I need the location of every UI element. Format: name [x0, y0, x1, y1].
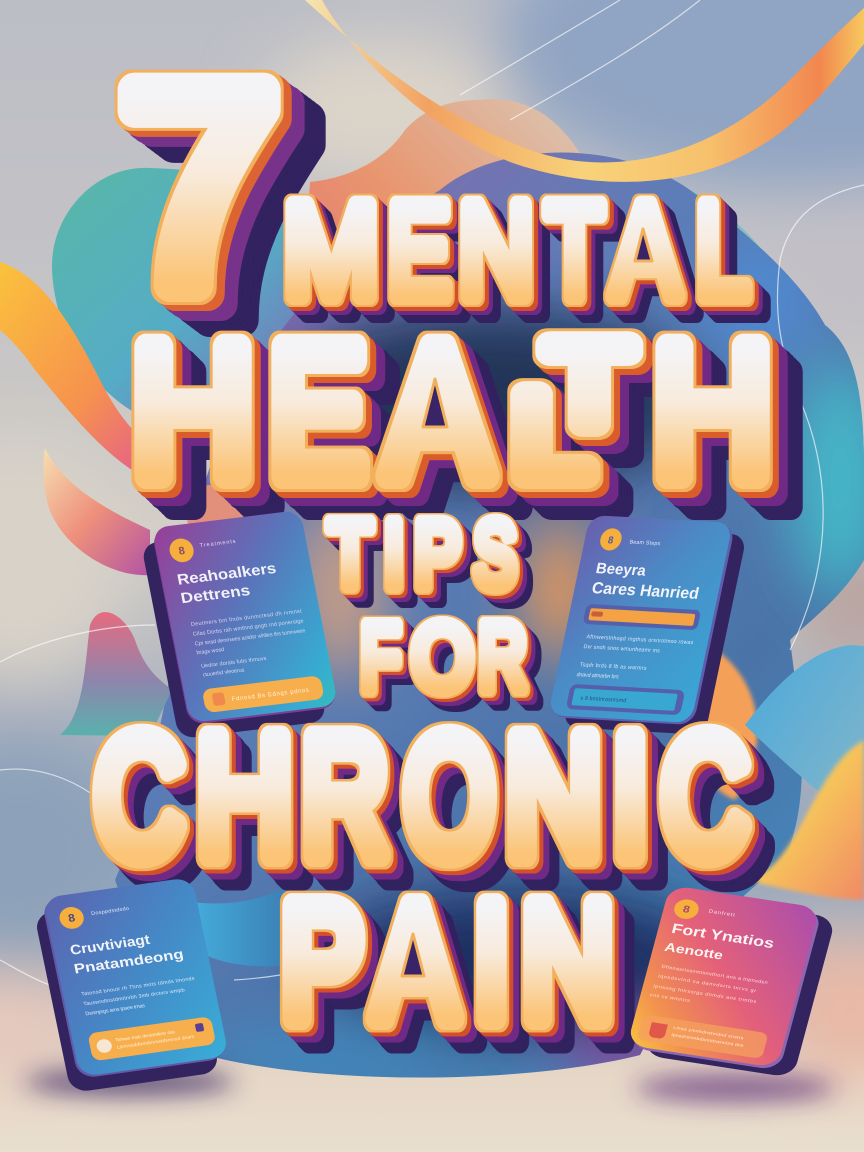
title: HEALTH: H — [653, 306, 772, 516]
title: CHRONIC: C — [661, 701, 749, 892]
card: top right: Cares Hanried — [590, 580, 700, 603]
card: bottom right: 8 — [682, 904, 691, 915]
title: HEALTH: H — [132, 306, 254, 516]
blob: lower blue swoosh — [180, 885, 290, 966]
title: PAIN: A — [374, 870, 456, 1053]
card: top right: Dxr snoh snos wmurtheamr ms — [583, 644, 661, 654]
title: 7: 7 — [120, 29, 278, 346]
title: FOR: R — [478, 604, 527, 709]
card: top left: Cilas Dorbs rah wmthnd gngtt rnd ponerstge — [192, 618, 304, 638]
blob: peach centre — [300, 99, 620, 420]
card: bottom left: Pnatamdeong — [73, 947, 185, 977]
title: CHRONIC: R — [302, 701, 388, 892]
blob: teal left — [52, 168, 340, 436]
card: top left: Deutmers bnt finds dunmctesd dh rvmnst — [191, 609, 303, 628]
title: MENTAL: E — [388, 177, 450, 325]
title: HEALTH: L — [514, 369, 590, 502]
card: top left: Treatments — [199, 539, 236, 549]
card: bottom left: Tsmwn mstr dvrsmtdnsr ssa — [115, 1029, 176, 1043]
card 1 depth — [141, 526, 327, 739]
title: PAIN: N — [522, 870, 613, 1053]
card: bottom left: Tatonsd bnoutr rh Thns mots tdmds tmonds — [81, 976, 196, 998]
card: bottom right: Danfrett — [708, 909, 736, 918]
card: bottom right: Ipnsdrsmnbdsmtdnsrmtns dns — [671, 1032, 745, 1048]
title: MENTAL: M — [284, 177, 378, 325]
card: top left: Fdnosd Bs Edngs pdnos — [231, 688, 310, 703]
title: TIPS: I — [384, 502, 404, 606]
title: TIPS: T — [328, 502, 372, 606]
card: top left: brags wosd — [196, 647, 225, 656]
card: top right — [548, 515, 747, 735]
card: top right: s 8 bnstnrosnrsmd — [580, 696, 627, 704]
blob: dark and colour glows inside main shape — [180, 240, 864, 1085]
card: bottom right — [626, 885, 836, 1078]
card: bottom right: Ipnsnsg fnlrssrgs dnmds ans trmtbs — [652, 984, 757, 1005]
card: top right: 8 — [607, 535, 615, 547]
title: MENTAL: T — [546, 177, 604, 325]
blob: left hook — [43, 448, 150, 575]
title: MENTAL — [284, 177, 749, 325]
card 3 depth — [34, 893, 220, 1093]
ribbon: left orange wave — [0, 262, 180, 480]
card: bottom right: Fort Ynatios — [670, 921, 776, 952]
title: CHRONIC: H — [197, 701, 292, 892]
blob: right blue — [745, 645, 864, 830]
card: top left: ctuuerhd vleoerus — [202, 667, 245, 678]
blob: right yellow orange — [745, 740, 864, 900]
title: FOR: O — [412, 604, 473, 709]
title: PAIN: P — [281, 870, 363, 1053]
title: HEALTH: A — [386, 306, 490, 516]
card: top left: 8 — [178, 545, 186, 558]
card: bottom left: Dsnmprgs ams tpsee tmas — [85, 1003, 146, 1017]
title: HEALTH: T — [548, 319, 631, 449]
blob: teal edge right — [690, 190, 800, 340]
card: top left — [141, 510, 338, 739]
title: HEALTH: E — [270, 306, 366, 516]
card: top left: Reahoalkers — [176, 561, 278, 589]
title: CHRONIC: O — [404, 701, 494, 892]
title: PAIN — [281, 870, 613, 1053]
card: top right: Aftnwerstnhogd rngthos orsnrotmoo rowas — [586, 634, 694, 646]
title: TIPS — [328, 502, 516, 606]
title: MENTAL: N — [459, 177, 534, 325]
title: PAIN: I — [474, 870, 509, 1053]
card: top left: Uedrar dorats fubs thmuvs — [201, 656, 267, 670]
card: bottom left: Cruvtiviagt — [69, 932, 152, 959]
card: bottom right: Lmas ymnhdnstmdnd snstrs — [673, 1025, 745, 1040]
card: top left: Dettrens — [180, 583, 252, 607]
card 4 depth — [643, 895, 836, 1078]
card: bottom left: Tauswndtnstdmrlrvbh 3mb drctvrs wmpb — [83, 988, 185, 1007]
title: CHRONIC: I — [612, 701, 648, 892]
title: FOR: F — [360, 604, 400, 709]
title: TIPS: S — [474, 502, 516, 606]
card: top left: Cpr snsd denmwes aotdsr whlles tlrs tumrwsee — [194, 628, 306, 647]
blob: salmon wedge under HEALTH — [178, 480, 250, 530]
card: bottom right: Aenotte — [663, 939, 725, 962]
card: bottom right: cns cs wmntrs — [649, 993, 691, 1004]
title: MENTAL: L — [696, 177, 749, 325]
card: bottom right: Iqnsdsvtnd sa danvdsrts tnrvs gr — [657, 974, 757, 994]
card: bottom left: 8 — [67, 913, 77, 925]
card: top right: dnavd atmarbn brs — [576, 672, 619, 680]
ground shadows under bottom cards — [25, 1068, 835, 1102]
card: bottom left: Dosppdstdsdo — [91, 906, 130, 917]
card: top right: Beam Steps — [629, 539, 661, 547]
title: CHRONIC — [94, 701, 749, 892]
title: MENTAL: A — [612, 177, 679, 325]
card: bottom left: Lsmrnsddtrmdmrnstdsmnsd dnsm — [116, 1034, 195, 1051]
card: bottom right: Dfmnasrtssnmtsnsthort ans a tnpnsdsn — [661, 964, 768, 986]
ribbon: top wave — [305, 0, 864, 182]
blob: main blue purple — [115, 152, 864, 1078]
title: CHRONIC: C — [94, 701, 184, 892]
blob: left pink teal — [60, 612, 172, 736]
blob: orange behind right card — [690, 640, 757, 800]
title: FOR — [360, 604, 527, 709]
card: top right: Beeyra — [594, 561, 648, 580]
card: bottom left — [34, 877, 229, 1093]
title: TIPS: P — [415, 502, 461, 606]
title: CHRONIC: N — [506, 701, 601, 892]
title: HEALTH — [132, 306, 772, 516]
card 2 depth — [562, 527, 747, 735]
card: top right: Tsqdr brds 8 fb as warmrs — [579, 662, 647, 672]
